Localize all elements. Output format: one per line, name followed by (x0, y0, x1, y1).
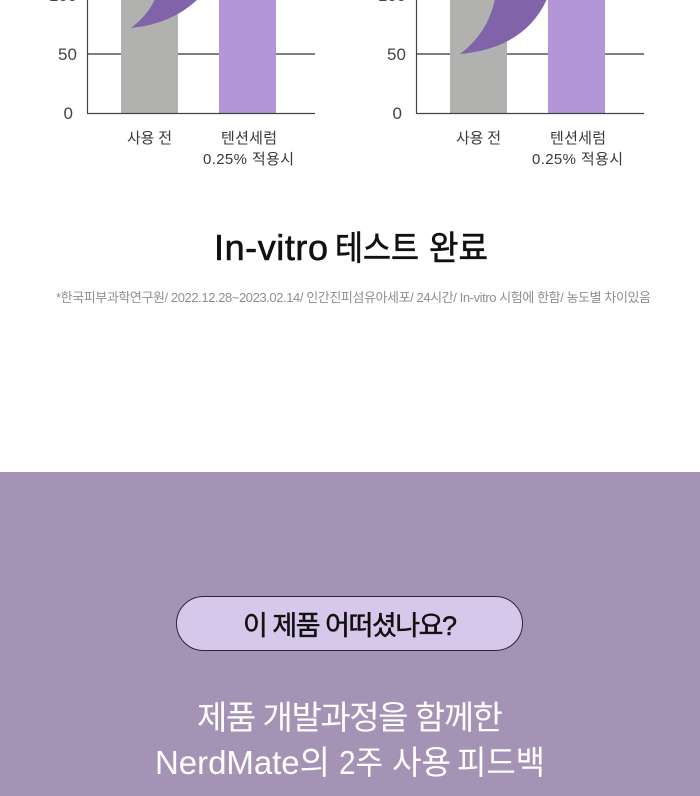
bar: before use (121, 0, 178, 114)
axis labels: 0 (392, 104, 402, 123)
category labels: 텐션세럼 (221, 130, 277, 147)
subheading (155, 699, 545, 781)
subheading: 2주 (339, 744, 383, 781)
arrow: right curve (460, 0, 547, 54)
axis labels: 50 (387, 45, 406, 64)
subheading: NerdMate의 (155, 744, 330, 781)
category labels: 사용 전 (127, 130, 172, 147)
pill: how was this product: 이 제품 어떠셨나요? (243, 611, 457, 641)
bar chart: right (378, 0, 644, 168)
footnote: *한국피부과학연구원/ 2022.12.28~2023.02.14/ 인간진피섬유아세포/ 24시간/ In-vitro 시험에 한함/ 농도별 차이있음 (56, 290, 651, 305)
bar: before use (450, 0, 507, 114)
heading: in-vitro test complete: 완료 (429, 230, 488, 268)
category labels: 사용 전 (456, 130, 501, 147)
axis labels (378, 0, 406, 123)
category labels: 0.25% 적용시 (532, 151, 623, 168)
category labels (127, 130, 294, 168)
axis labels: 50 (58, 45, 77, 64)
subheading: 사용 (392, 744, 451, 781)
category labels (456, 130, 623, 168)
category labels: 0.25% 적용시 (203, 151, 294, 168)
bar: tension serum (548, 0, 605, 114)
heading: in-vitro test complete (214, 227, 488, 268)
bar chart: left (49, 0, 315, 168)
subheading: 피드백 (457, 744, 545, 781)
axis labels: 0 (64, 104, 73, 123)
heading: in-vitro test complete: 테스트 (335, 230, 419, 268)
category labels: 텐션세럼 (550, 130, 606, 147)
bar: tension serum (219, 0, 276, 114)
pill: how was this product (176, 596, 522, 650)
arrow: left curve (131, 0, 198, 28)
axis labels (49, 0, 77, 123)
heading: in-vitro test complete: In-vitro (214, 227, 328, 268)
panel: feedback section (0, 472, 700, 796)
subheading: 제품 개발과정을 함께한 (197, 699, 503, 736)
